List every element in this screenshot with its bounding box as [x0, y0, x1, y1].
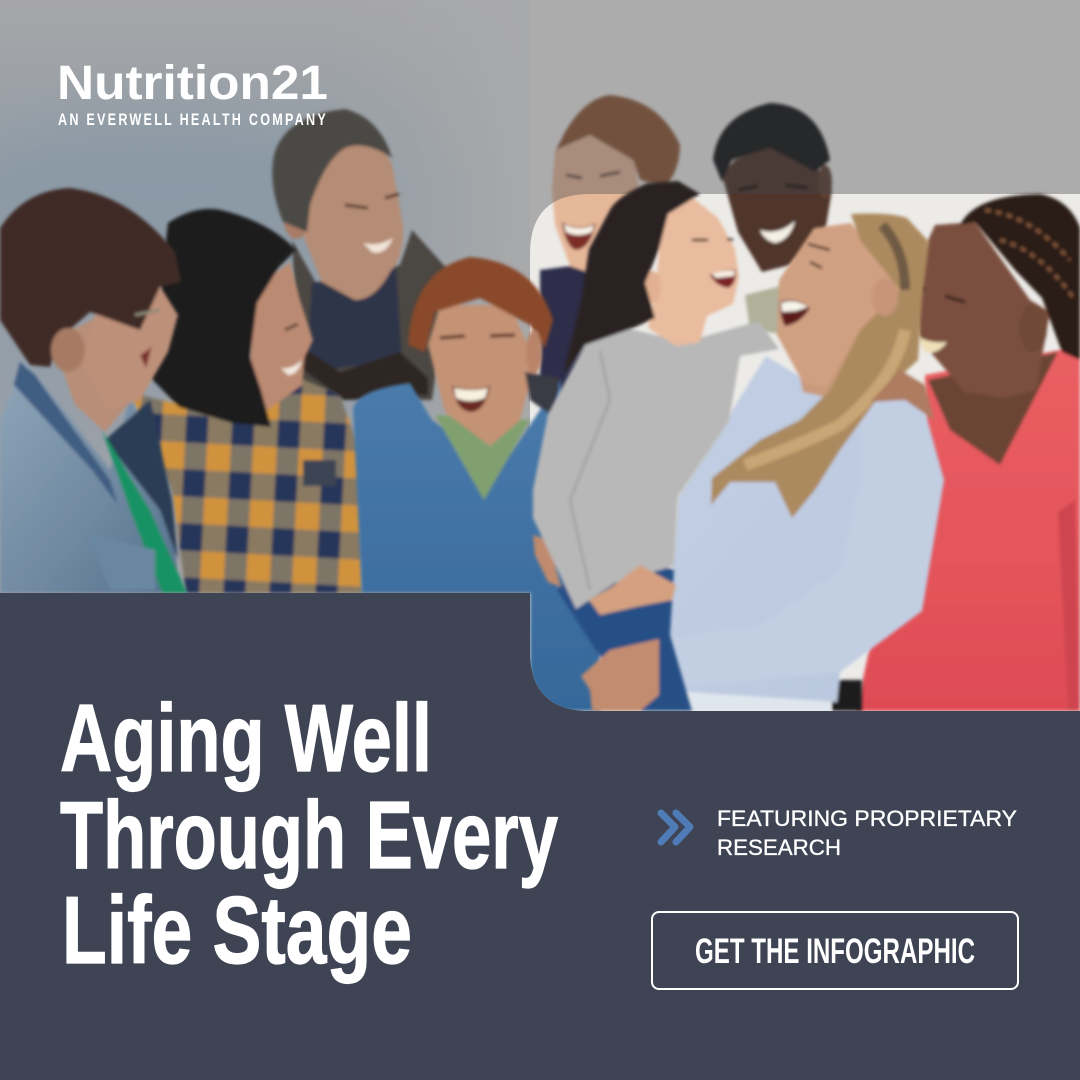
feature text: [717, 806, 1017, 860]
feature text: RESEARCH: [717, 835, 841, 860]
button: get the infographic: [652, 912, 1018, 989]
sky background: [0, 0, 1080, 720]
photo: group of laughing people: [0, 0, 1080, 720]
woman in denim jacket on left: [0, 188, 187, 593]
feature text: FEATURING PROPRIETARY: [717, 806, 1017, 831]
logo: [57, 57, 328, 129]
man with short black hair: [713, 103, 832, 335]
child in grey shirt with mother's hand: [533, 181, 779, 711]
icon: double chevron: [661, 813, 690, 842]
mother with ponytail in light blue sweater: [661, 214, 944, 711]
woman in denim shirt centre: [353, 257, 600, 711]
man with red hair: [540, 95, 680, 400]
logo tagline: AN EVERWELL HEALTH COMPANY: [58, 110, 328, 129]
title: Through Every: [60, 782, 558, 889]
title: Life Stage: [62, 877, 412, 984]
man with grey hair: [272, 109, 450, 400]
woman in plaid shirt: [130, 209, 362, 593]
title: [60, 685, 558, 984]
grey overlay above the bright window: [530, 0, 1080, 254]
title: Aging Well: [60, 685, 432, 792]
logo wordmark: Nutrition21: [57, 57, 328, 110]
woman with braids in coral top: [856, 194, 1080, 711]
